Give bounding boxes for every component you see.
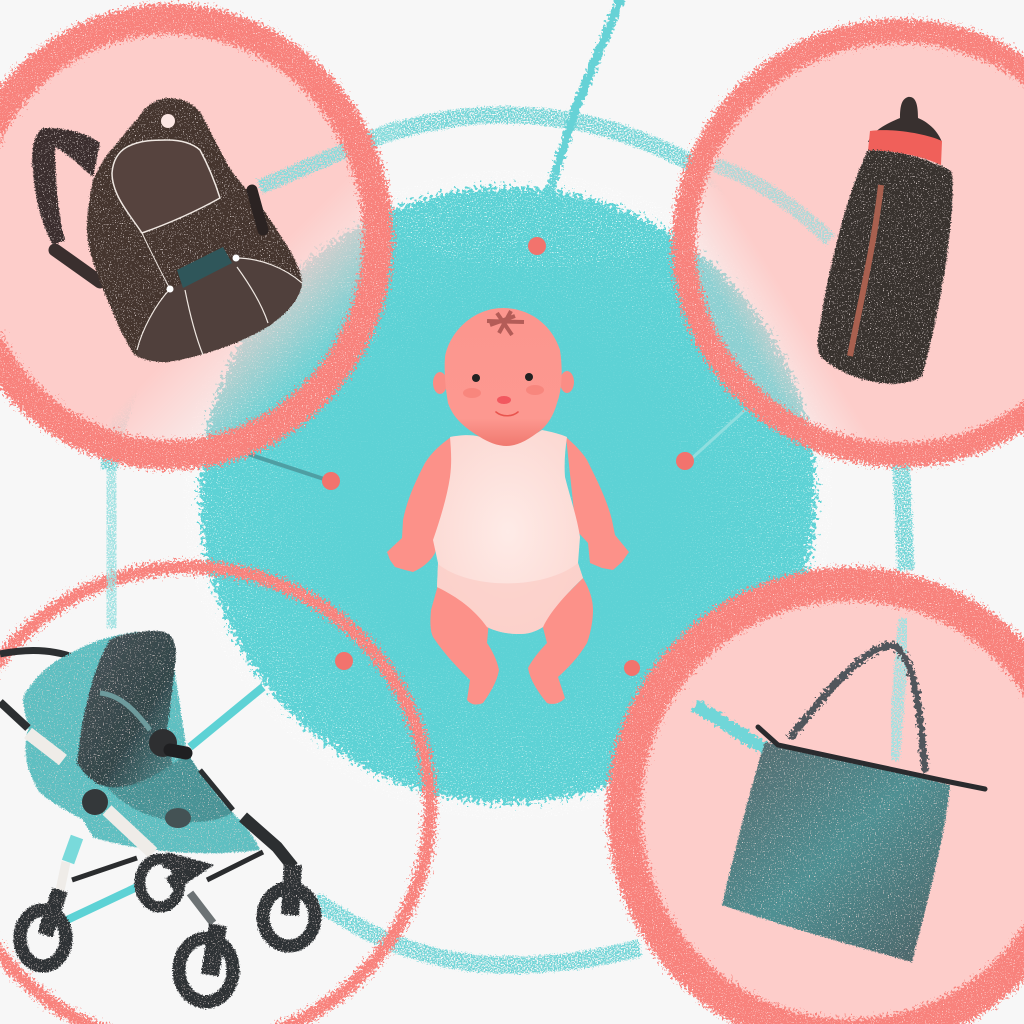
baby arms	[387, 437, 629, 572]
baby	[387, 308, 629, 705]
panel: bottle circle	[684, 31, 1024, 455]
teal central blob	[183, 170, 833, 820]
icon: stroller	[0, 631, 315, 1002]
baby legs	[430, 578, 593, 705]
connector lines and dots	[245, 237, 745, 676]
baby onesie	[433, 430, 583, 634]
panel: backpack circle	[0, 19, 400, 455]
panel: tote bag circle	[624, 584, 1024, 1024]
stroller wheels	[20, 859, 315, 1002]
icon: feeding bottle	[818, 97, 952, 384]
icon: backpack	[32, 98, 302, 362]
baby head	[433, 308, 574, 446]
icon: tote bag	[722, 645, 985, 962]
line to top	[540, 0, 622, 228]
panel: stroller circle	[0, 470, 430, 1024]
thin teal ring	[108, 115, 906, 965]
